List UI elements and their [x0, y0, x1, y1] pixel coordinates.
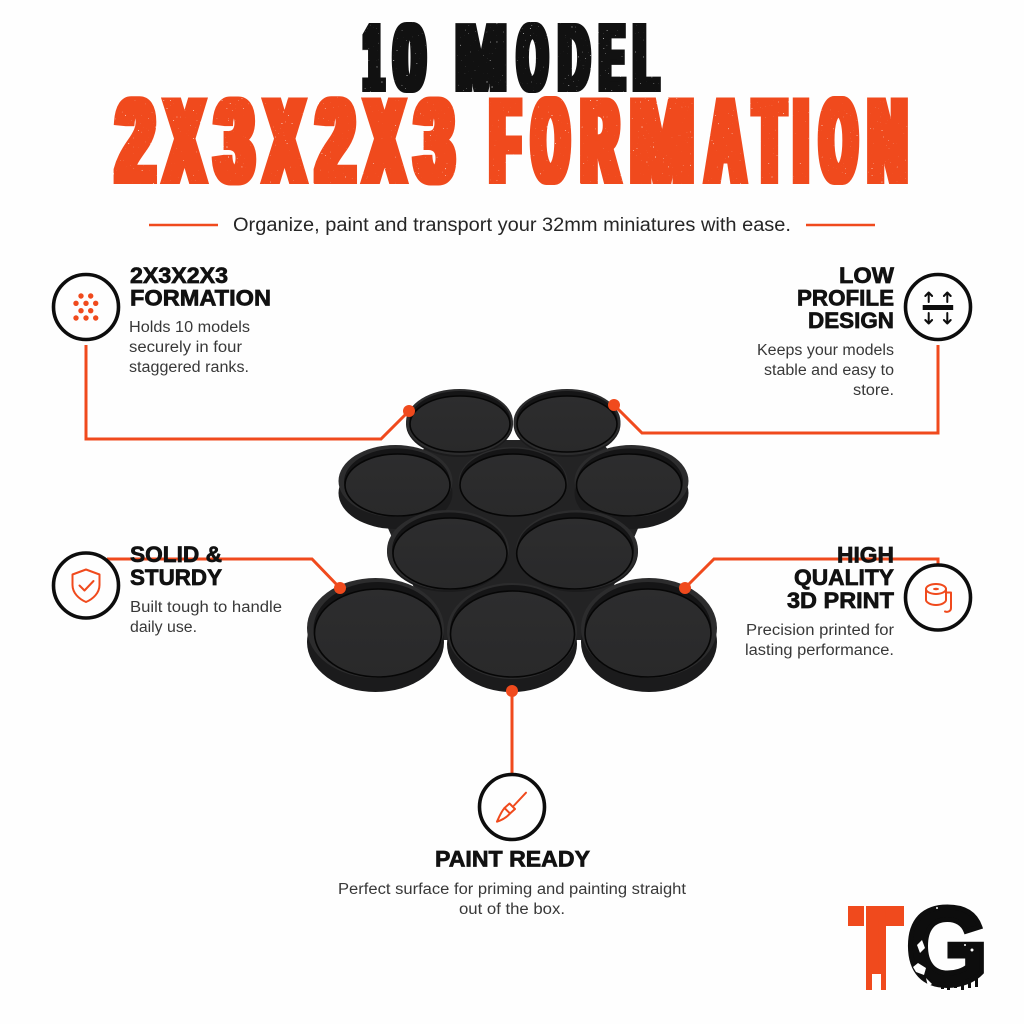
heading: low profile design: PROFILE [797, 286, 894, 310]
feature: paint ready [338, 774, 687, 918]
text: low profile description: Keeps your models [757, 342, 894, 359]
heading: low profile design: DESIGN [808, 308, 894, 333]
heading: high quality 3d print: HIGH [837, 542, 894, 568]
title: 2X3X2X3 FORMATION: 3 [216, 75, 253, 206]
title: 10 MODEL [364, 6, 658, 110]
title: 2X3X2X3 FORMATION: 3 [416, 75, 453, 206]
logo: TG [848, 880, 988, 1016]
product: 10-model movement tray [307, 389, 717, 692]
heading: high quality 3d print [787, 542, 895, 613]
heading: high quality 3d print: QUALITY [794, 565, 894, 590]
heading: paint ready: PAINT READY [435, 846, 590, 872]
feature: solid and sturdy [54, 542, 282, 636]
title: 2X3X2X3 FORMATION: O [533, 75, 568, 206]
subtitle: Organize, paint and transport your 32mm miniatures with ease. [233, 215, 791, 236]
title: 2X3X2X3 FORMATION: X [166, 75, 203, 206]
connector: paint ready [506, 685, 518, 773]
feature: high quality 3D print [745, 542, 970, 659]
text: high quality description [745, 622, 894, 659]
text: solid description: Built tough to handle [130, 599, 282, 616]
title: 2X3X2X3 FORMATION: T [755, 75, 784, 206]
connector: high quality [679, 559, 938, 594]
logo: TG: T [866, 880, 886, 1016]
text: low profile description: store. [853, 382, 894, 399]
heading: solid and sturdy: STURDY [130, 565, 222, 590]
heading: solid and sturdy [130, 542, 222, 590]
title: 2X3X2X3 FORMATION [117, 75, 906, 206]
text: formation description [129, 319, 250, 376]
title: 2X3X2X3 FORMATION: R [582, 75, 618, 206]
title: 10 MODEL: D [559, 6, 589, 110]
title: 2X3X2X3 FORMATION: 2 [117, 75, 154, 206]
feature: low profile design [757, 263, 970, 399]
title: 10 MODEL: 1 [364, 6, 383, 110]
text: formation description: Holds 10 models [129, 319, 250, 336]
text: low profile description: stable and easy to [764, 362, 894, 379]
text: solid description [130, 599, 282, 636]
title: 2X3X2X3 FORMATION: F [491, 75, 519, 206]
heading: low profile design: LOW [839, 263, 894, 288]
text: formation description: securely in four [129, 339, 242, 356]
text: paint ready description [338, 881, 687, 918]
title: 2X3X2X3 FORMATION: I [795, 75, 807, 206]
title: 2X3X2X3 FORMATION: A [707, 75, 744, 206]
title: 10 MODEL: M [456, 6, 506, 110]
text: paint ready description: out of the box. [459, 901, 565, 918]
icon: dot formation [54, 274, 118, 340]
title: 2X3X2X3 FORMATION: O [821, 75, 856, 206]
text: formation description: staggered ranks. [129, 359, 249, 376]
icon: shield with check [54, 553, 118, 618]
heading: high quality 3d print: 3D PRINT [787, 588, 895, 613]
text: paint ready description: Perfect surface for priming and painting straight [338, 881, 687, 898]
title: 10 MODEL: 0 [394, 6, 425, 110]
text: N [869, 75, 906, 206]
connector: low profile [608, 345, 938, 433]
title: 2X3X2X3 FORMATION: M [631, 75, 693, 206]
text: solid description: daily use. [130, 619, 197, 636]
title: 2X3X2X3 FORMATION: X [266, 75, 303, 206]
text: high quality description: lasting performance. [745, 642, 894, 659]
heading: formation: 2X3X2X3 [130, 263, 228, 288]
icon: low profile arrows [906, 274, 970, 340]
heading: formation [130, 263, 271, 310]
text: high quality description: Precision printed for [746, 622, 894, 639]
icon: paint brush [480, 774, 544, 840]
heading: formation: FORMATION [130, 286, 271, 310]
title: 2X3X2X3 FORMATION: X [366, 75, 403, 206]
title: 2X3X2X3 FORMATION: 2 [317, 75, 354, 206]
icon: filament spool [906, 565, 970, 630]
feature: 2X3X2X3 formation [54, 263, 271, 376]
connector: formation [86, 345, 415, 439]
connector: solid and sturdy [107, 559, 346, 594]
title: 10 MODEL: E [600, 6, 624, 110]
logo: TG: G [906, 886, 988, 1008]
text: L [634, 6, 658, 110]
heading: solid and sturdy: SOLID & [130, 542, 222, 567]
text: low profile description [757, 342, 894, 399]
title: 10 MODEL: O [518, 6, 547, 110]
heading: low profile design [797, 263, 894, 333]
